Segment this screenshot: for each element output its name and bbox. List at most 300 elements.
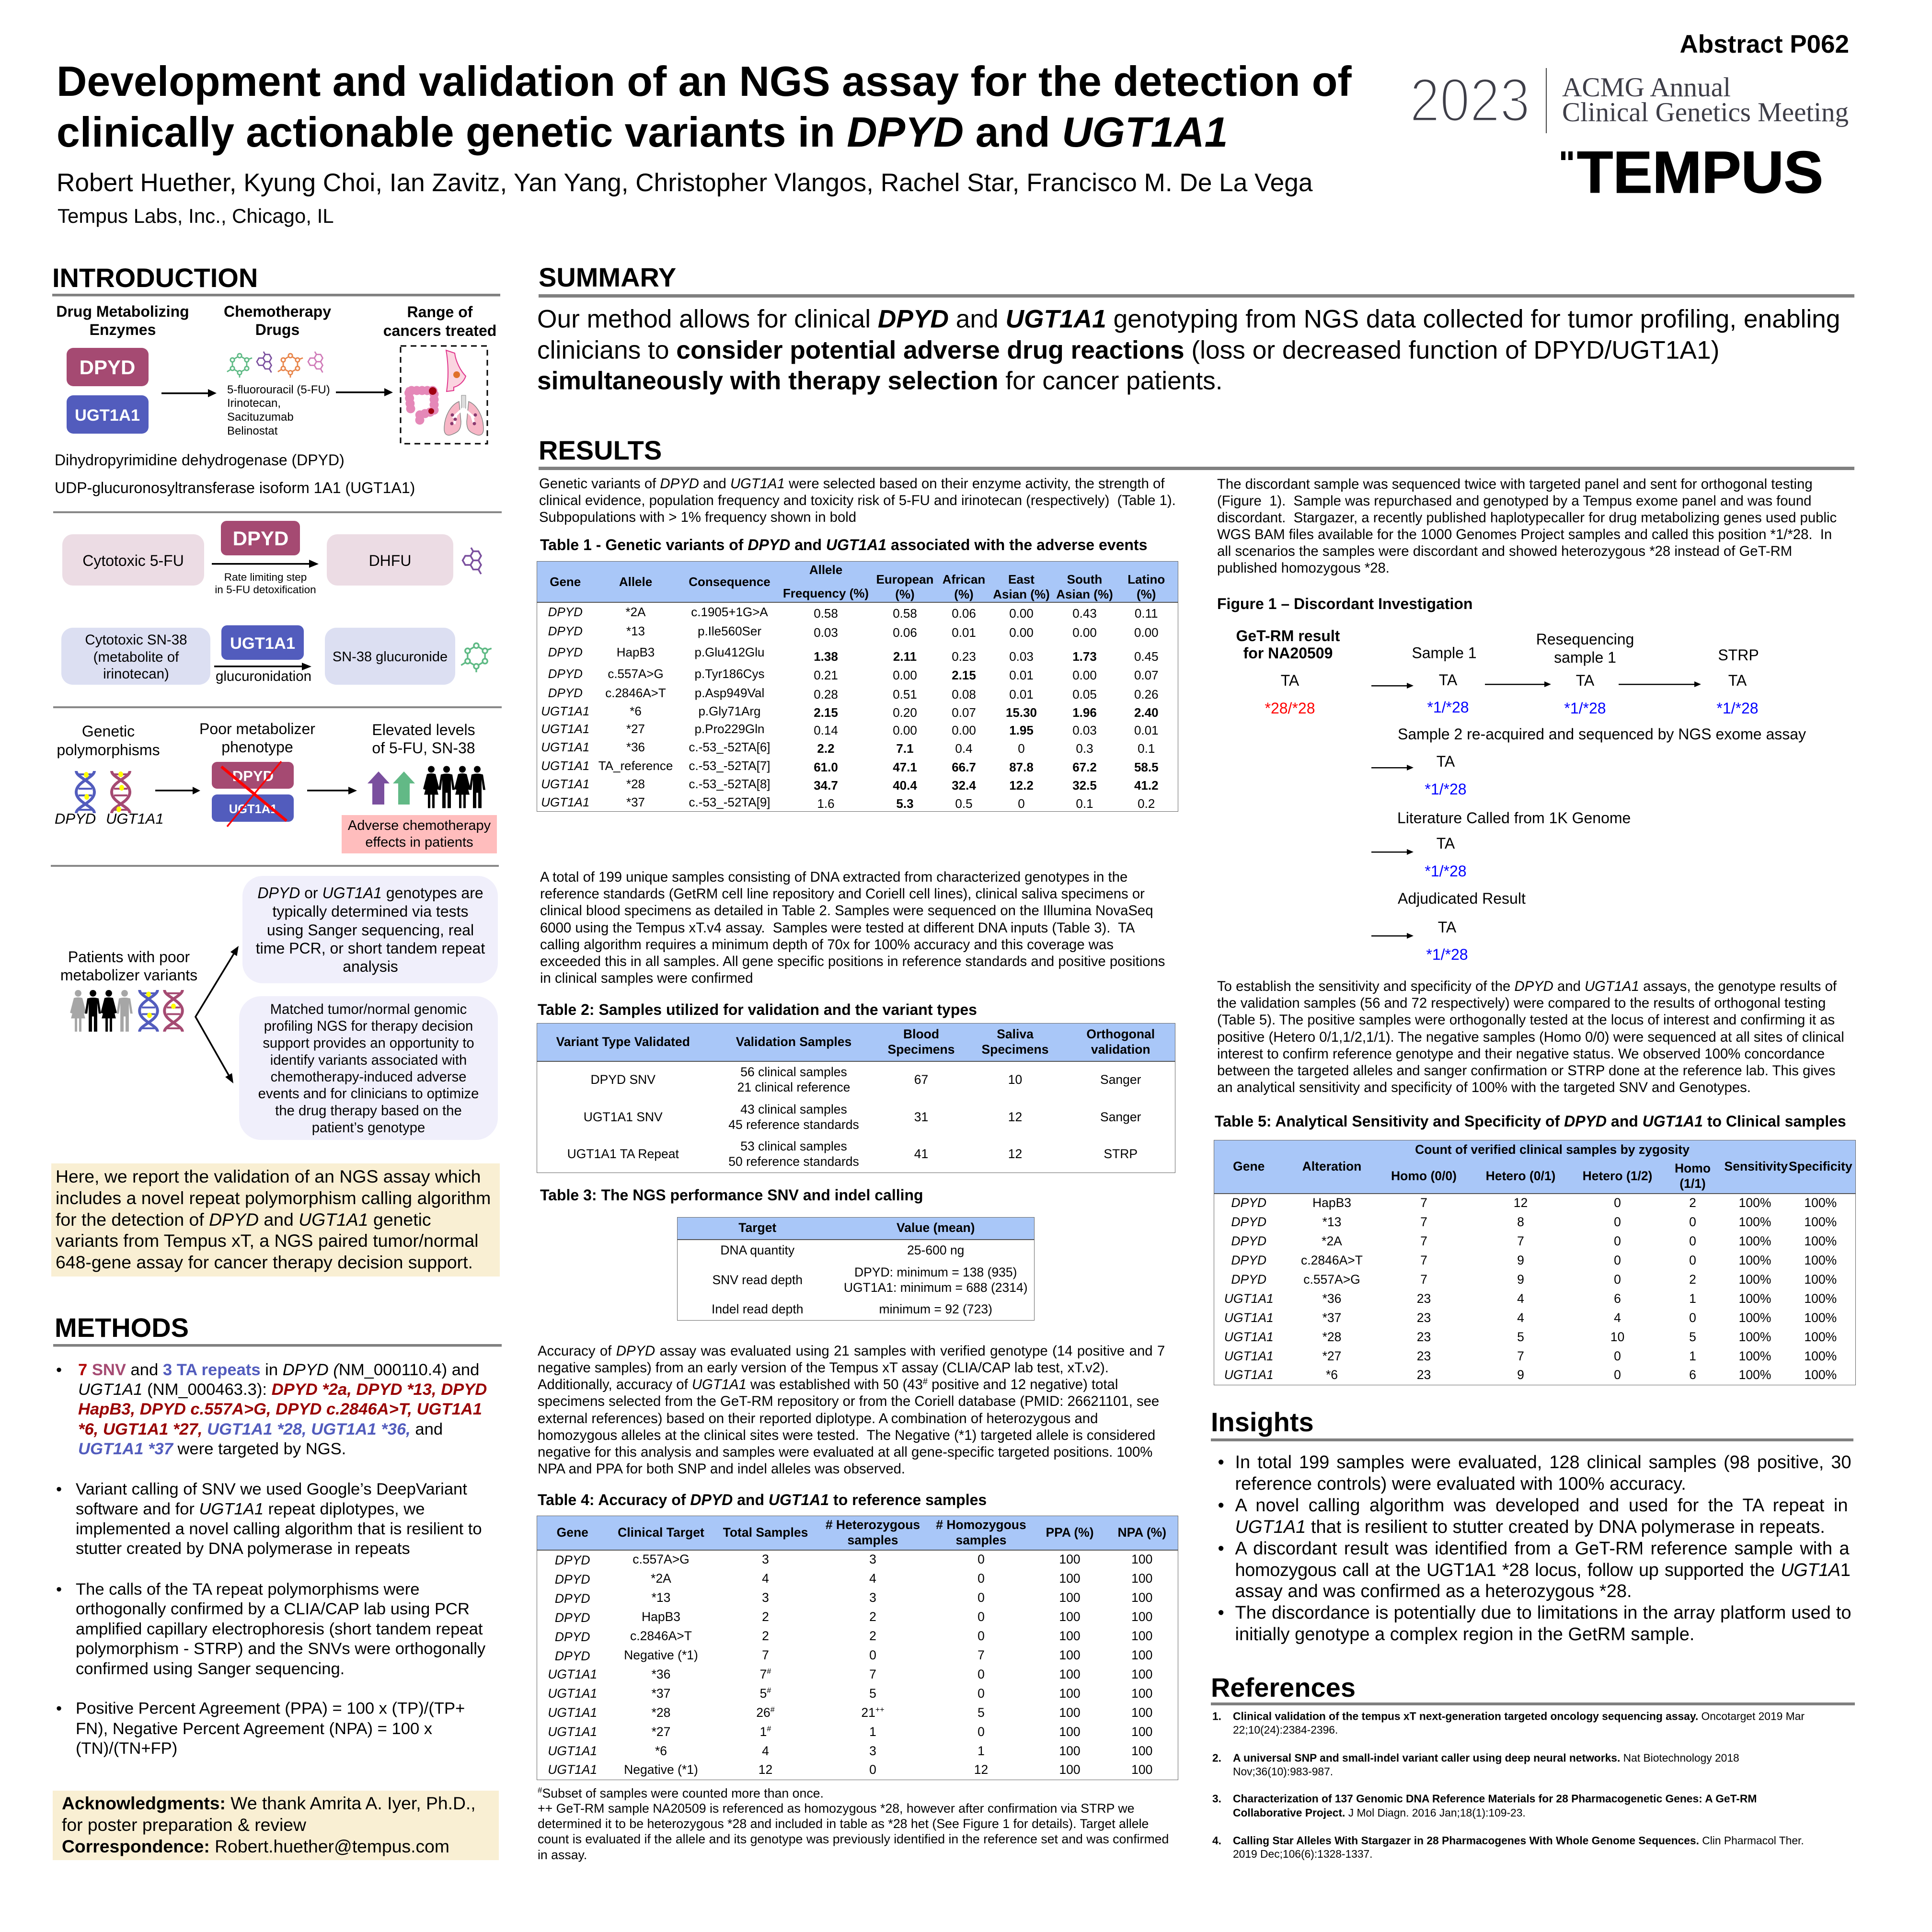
results paragraph: samples: reference standards (GetRM cell line repository and Coriell cell lines), clinical saliva specimens or xyxy=(540,886,1145,902)
table 1: genetic variants: 0.14 xyxy=(814,723,838,737)
insights bullets: UGT1A1 that is resilient to stutter created by DNA polymerase in repeats. xyxy=(1235,1517,1825,1537)
poor metabolizer phenotype xyxy=(199,720,315,827)
table 1: genetic variants: 12.2 xyxy=(1009,778,1034,793)
table 4: accuracy: 100 xyxy=(1131,1686,1152,1701)
heading: summary: SUMMARY xyxy=(539,262,676,292)
table 5: sensitivity and specificity: 0 xyxy=(1614,1368,1621,1382)
table 4: accuracy: 4 xyxy=(869,1571,876,1586)
table 1: genetic variants: Asian (%) xyxy=(993,587,1050,601)
callout: report statement: Here, we report the validation of an NGS assay which xyxy=(56,1166,481,1186)
table 1: genetic variants: 32.5 xyxy=(1072,778,1097,793)
table 5: sensitivity and specificity: 0 xyxy=(1614,1196,1621,1210)
genetic polymorphisms: DPYD xyxy=(55,810,96,827)
table 5: sensitivity and specificity: 100% xyxy=(1739,1291,1771,1306)
insights bullets: • xyxy=(1218,1539,1224,1559)
results paragraph: accuracy: external references) based on their reported diplotype. A combination of heterozygous and xyxy=(538,1411,1098,1426)
table 5: sensitivity and specificity: 4 xyxy=(1517,1311,1524,1325)
table 1: genetic variants: c.557A>G xyxy=(608,667,664,681)
table 1: genetic variants: c.1905+1G>A xyxy=(691,605,768,619)
table 2: validation samples: Variant Type Validated xyxy=(556,1035,690,1049)
results paragraph: samples: in clinical samples were confirmed xyxy=(540,970,753,986)
table 4 footnotes: determined it to be heterozygous *28 and included in table as *28 het (See Figure 1 for details). Target allele xyxy=(538,1817,1149,1831)
table 4: accuracy: 4 xyxy=(762,1571,769,1586)
table 5: sensitivity and specificity: 5 xyxy=(1517,1330,1524,1344)
bubble: matched tumor/normal: identify variants associated with xyxy=(270,1053,467,1068)
table 1: genetic variants: 0.00 xyxy=(1009,606,1034,621)
table 3: NGS performance xyxy=(677,1217,1035,1321)
table 4: accuracy: Negative (*1) xyxy=(624,1762,698,1777)
enzyme box: UGT1A1 xyxy=(67,395,149,434)
table 4: accuracy: *27 xyxy=(652,1725,670,1739)
results paragraph: discordant sample: all scenarios the samples were discordant and showed heterozygous *28 instead of GeT-RM xyxy=(1217,543,1792,559)
table 5: sensitivity and specificity: 100% xyxy=(1739,1272,1771,1287)
table 1: genetic variants: 0.3 xyxy=(1076,741,1093,756)
table 5: sensitivity and specificity: 100% xyxy=(1739,1234,1771,1248)
sample 1: TA xyxy=(1439,671,1458,689)
insights bullets: assay and was confirmed as a heterozygous *28. xyxy=(1235,1581,1632,1601)
column headers: cancers treated xyxy=(383,322,496,339)
results paragraph: samples: clinical blood specimens as detailed in Table 2. Samples were sequenced on the Illumina NovaSeq xyxy=(540,903,1153,919)
abstract number: Abstract P062 xyxy=(1679,30,1849,58)
results paragraph: sensitivity: (Table 5). The positive samples were orthogonally tested at the locus of interest and confirming it as xyxy=(1217,1012,1835,1028)
results paragraph: sensitivity: positive (Hetero 0/1,1/2,1/1). The negative samples (Homo 0/0) were sequenced at all sites of clinical xyxy=(1217,1029,1844,1045)
patients with poor metabolizer variants: Patients with poor xyxy=(68,948,190,966)
table 1: genetic variants: 0.03 xyxy=(1072,723,1097,737)
table 4: accuracy: 5# xyxy=(760,1686,771,1701)
table 5: sensitivity and specificity: Gene xyxy=(1233,1159,1265,1173)
icon: purple molecule xyxy=(463,548,481,574)
table 1: genetic variants: 0.00 xyxy=(1072,668,1097,682)
table 4: accuracy: *13 xyxy=(652,1590,670,1605)
bullet: targets: HapB3, DPYD c.557A>G, DPYD c.2846A>T, UGT1A1 xyxy=(78,1400,482,1418)
table 1: genetic variants: 0.26 xyxy=(1134,687,1159,702)
icon: drug molecules xyxy=(227,352,322,378)
table 4: accuracy: 2 xyxy=(869,1610,876,1624)
column headers: Drugs xyxy=(255,321,299,338)
table 5: sensitivity and specificity: 0 xyxy=(1614,1215,1621,1229)
bullet: orthogonal confirmation: amplified capillary electrophoresis (short tandem repeat xyxy=(76,1620,483,1638)
table 5: sensitivity and specificity: 7 xyxy=(1517,1234,1524,1248)
rate limiting caption: in 5-FU detoxification xyxy=(215,584,316,596)
table 5: sensitivity and specificity: 4 xyxy=(1517,1291,1524,1306)
table 4: accuracy: 100 xyxy=(1059,1725,1081,1739)
table 5: sensitivity and specificity xyxy=(1214,1140,1856,1385)
table 4: accuracy: UGT1A1 xyxy=(548,1686,597,1701)
table 1: genetic variants: 87.8 xyxy=(1009,760,1034,774)
table 2: validation samples: 45 reference standards xyxy=(728,1117,859,1132)
table 4: accuracy: 100 xyxy=(1059,1686,1081,1701)
heading: results xyxy=(539,435,1854,470)
table 5: sensitivity and specificity: DPYD xyxy=(1231,1234,1266,1248)
acknowledgments: Correspondence: Robert.huether@tempus.com xyxy=(62,1836,449,1856)
table 1: genetic variants: African xyxy=(943,572,985,586)
box: SN-38 glucuronide: SN-38 glucuronide xyxy=(333,649,448,665)
table 1: genetic variants: European xyxy=(876,572,933,586)
table 4: accuracy: 100 xyxy=(1059,1629,1081,1643)
results paragraph: samples: calling algorithm requires a minimum depth of 70x for 100% accuracy and this coverage was xyxy=(540,937,1114,953)
table 5: sensitivity and specificity: 0 xyxy=(1614,1234,1621,1248)
callout: report statement: for the detection of DPYD and UGT1A1 genetic xyxy=(56,1209,431,1230)
table 5: sensitivity and specificity: 7 xyxy=(1420,1234,1427,1248)
reference 2: Nov;36(10):983-987. xyxy=(1233,1765,1333,1778)
table 4: accuracy: 1 xyxy=(869,1725,876,1739)
table 5: sensitivity and specificity: Homo xyxy=(1675,1161,1711,1175)
results paragraph: accuracy: positive and 12 negative) total xyxy=(928,1377,1118,1392)
bubble: matched tumor/normal: patient’s genotype xyxy=(312,1120,425,1136)
bullet: orthogonal confirmation: The calls of the TA repeat polymorphisms were xyxy=(76,1580,420,1598)
table 5: sensitivity and specificity: Sensitivity xyxy=(1725,1159,1788,1173)
table 1: genetic variants: 41.2 xyxy=(1134,778,1159,793)
adjudicated row xyxy=(1371,890,1526,963)
table 1: genetic variants: 1.6 xyxy=(817,796,835,811)
column headers xyxy=(56,303,496,339)
table 1: genetic variants: 0.05 xyxy=(1072,687,1097,702)
bubble: current testing: using Sanger sequencing, real xyxy=(267,921,474,939)
table 1: genetic variants: 0 xyxy=(1018,796,1025,811)
table 1: genetic variants: 0.4 xyxy=(955,741,973,756)
bullet: targets: and 3 TA repeats in DPYD (NM_000110.4) and xyxy=(131,1361,479,1379)
table 5: sensitivity and specificity: 0 xyxy=(1614,1272,1621,1287)
table 5: sensitivity and specificity: 0 xyxy=(1689,1253,1696,1267)
bullet: targets: 7 SNV xyxy=(78,1361,126,1379)
table 2: validation samples: 41 xyxy=(914,1147,928,1161)
table 4: accuracy: 21++ xyxy=(861,1705,885,1720)
table 5: sensitivity and specificity: UGT1A1 xyxy=(1224,1291,1274,1306)
results paragraph: discordant sample: (Figure 1). Sample was repurchased and genotyped by a Tempus exome panel and was found xyxy=(1217,493,1811,509)
acknowledgments: for poster preparation & review xyxy=(62,1815,307,1835)
table 1: genetic variants: UGT1A1 xyxy=(541,777,589,791)
logo: Tempus: TEMPUS xyxy=(1577,140,1823,206)
table 1: genetic variants: 1.95 xyxy=(1009,723,1034,737)
insights bullets: initially genotype a complex region in the GetRM sample. xyxy=(1235,1624,1694,1644)
adjudicated row: Adjudicated Result xyxy=(1398,890,1526,907)
table 1: genetic variants: 0.28 xyxy=(814,687,838,702)
table 5: sensitivity and specificity: 100% xyxy=(1804,1272,1837,1287)
box: cytotoxic SN-38: Cytotoxic SN-38 xyxy=(85,632,187,648)
table 4: accuracy: 7 xyxy=(762,1648,769,1662)
table 4: accuracy: c.557A>G xyxy=(632,1552,690,1566)
methods bullets xyxy=(56,1361,487,1758)
table 5: sensitivity and specificity: 100% xyxy=(1804,1234,1837,1248)
table 3 title: Table 3: The NGS performance SNV and indel calling xyxy=(540,1186,923,1204)
bullet: targets: • xyxy=(56,1361,62,1379)
drug list: Irinotecan, xyxy=(227,397,281,410)
table 5: sensitivity and specificity: 0 xyxy=(1614,1253,1621,1267)
table 2: validation samples: Saliva xyxy=(997,1027,1034,1041)
table 4 footnotes: ++ GeT-RM sample NA20509 is referenced as homozygous *28, however after confirmation via STRP we xyxy=(538,1801,1135,1816)
table 4: accuracy: DPYD xyxy=(555,1591,590,1606)
icon: green molecule xyxy=(461,643,492,672)
table 4 footnotes: # xyxy=(538,1785,542,1795)
callout: adverse effects: effects in patients xyxy=(365,835,473,850)
STRP: *1/*28 xyxy=(1716,700,1759,717)
table 1: genetic variants: 66.7 xyxy=(952,760,976,774)
results paragraph: samples: A total of 199 unique samples consisting of DNA extracted from characterized genotypes in the xyxy=(540,869,1127,885)
table 1: genetic variants: *36 xyxy=(626,740,645,754)
table 4: accuracy: 0 xyxy=(978,1610,985,1624)
table 1: genetic variants: UGT1A1 xyxy=(541,795,589,809)
insights bullets: • xyxy=(1218,1452,1224,1472)
arrow xyxy=(155,787,200,794)
bubble: current testing: time PCR, or short tandem repeat xyxy=(256,940,485,957)
table 5: sensitivity and specificity: 2 xyxy=(1689,1272,1696,1287)
sample 2 row: TA xyxy=(1437,753,1455,770)
table 4: accuracy: 100 xyxy=(1059,1744,1081,1758)
table 5: sensitivity and specificity: 1 xyxy=(1689,1291,1696,1306)
table 1: genetic variants: (%) xyxy=(1137,587,1156,601)
table 5: sensitivity and specificity: (1/1) xyxy=(1679,1176,1706,1190)
table 5: sensitivity and specificity: Specificity xyxy=(1789,1159,1852,1173)
table 4: accuracy: 3 xyxy=(869,1744,876,1758)
table 5: sensitivity and specificity: c.2846A>T xyxy=(1301,1253,1363,1267)
table 4: accuracy: 2 xyxy=(869,1629,876,1643)
arrow xyxy=(1619,681,1701,687)
arrow: drugs to cancers xyxy=(336,388,393,396)
panel: enzymes, drugs and cancers xyxy=(55,303,496,496)
summary text: simultaneously with therapy selection for cancer patients. xyxy=(537,367,1223,395)
table 1: genetic variants: 1.96 xyxy=(1072,705,1097,720)
table 1: genetic variants: 5.3 xyxy=(896,796,914,811)
table 5: sensitivity and specificity: 9 xyxy=(1517,1272,1524,1287)
table 1: genetic variants: DPYD xyxy=(548,645,583,659)
genetic polymorphisms: polymorphisms xyxy=(57,741,160,759)
table 4: accuracy: DPYD xyxy=(555,1572,590,1587)
table 1: genetic variants: *27 xyxy=(626,722,645,736)
poor metabolizer phenotype: UGT1A1 xyxy=(229,803,277,816)
table 4: accuracy: 1 xyxy=(978,1744,985,1758)
reference 2: 2. xyxy=(1212,1752,1221,1764)
panel: poor metabolizer flow xyxy=(55,720,497,853)
table 5: sensitivity and specificity: *37 xyxy=(1322,1311,1341,1325)
table 1: genetic variants: 0 xyxy=(1018,741,1025,756)
bullet: orthogonal confirmation: confirmed using Sanger sequencing. xyxy=(76,1660,345,1678)
column headers: Chemotherapy xyxy=(224,303,331,320)
table 4: accuracy: 0 xyxy=(978,1686,985,1701)
table 5: sensitivity and specificity: 5 xyxy=(1689,1330,1696,1344)
table 5: sensitivity and specificity: HapB3 xyxy=(1312,1196,1351,1210)
table 1: genetic variants: 58.5 xyxy=(1134,760,1159,774)
table 5: sensitivity and specificity: 2 xyxy=(1689,1196,1696,1210)
table 5: sensitivity and specificity: 4 xyxy=(1614,1311,1621,1325)
reference 4: Clin Pharmacol Ther. xyxy=(1702,1834,1804,1847)
drug list: Sacituzumab xyxy=(227,411,294,424)
column headers: Drug Metabolizing xyxy=(56,303,189,320)
table 1: genetic variants: 2.11 xyxy=(893,649,917,664)
reference 1: Clinical validation of the tempus xT next-generation targeted oncology sequencing assay. xyxy=(1233,1710,1698,1722)
sample 1: Sample 1 xyxy=(1412,644,1477,661)
table 4: accuracy: *37 xyxy=(652,1686,670,1701)
results paragraph: sensitivity: an analytical sensitivity and specificity of 100% with the targeted SNV and Genotypes. xyxy=(1217,1080,1751,1095)
table 3: NGS performance: Indel read depth xyxy=(712,1302,804,1316)
sample 1 xyxy=(1412,644,1477,716)
table 4: accuracy: 100 xyxy=(1059,1648,1081,1662)
table 4: accuracy: Gene xyxy=(557,1525,588,1540)
table 5: sensitivity and specificity: 0 xyxy=(1614,1349,1621,1363)
table 4: accuracy: 0 xyxy=(869,1762,876,1777)
table 2: validation samples: Sanger xyxy=(1100,1072,1141,1087)
table 1: genetic variants: 0.00 xyxy=(893,723,917,737)
table 4: accuracy: 0 xyxy=(869,1648,876,1662)
table 1: genetic variants: Frequency (%) xyxy=(783,586,869,600)
reference 1: 22;10(24):2384-2396. xyxy=(1233,1724,1338,1736)
table 4: accuracy: 5 xyxy=(978,1705,985,1720)
table 1: genetic variants: 0.00 xyxy=(1134,625,1159,640)
STRP xyxy=(1716,646,1759,717)
table 4 title: Table 4: Accuracy of DPYD and UGT1A1 to reference samples xyxy=(538,1491,987,1508)
bullet: orthogonal confirmation: • xyxy=(56,1580,62,1598)
table 1: genetic variants: 0.23 xyxy=(952,649,976,664)
table 1: genetic variants: (%) xyxy=(895,587,915,601)
table 2: validation samples: DPYD SNV xyxy=(590,1072,656,1087)
enzyme definitions: UDP-glucuronosyltransferase isoform 1A1 (UGT1A1) xyxy=(55,479,415,496)
table 1: genetic variants: 40.4 xyxy=(893,778,917,793)
bubble: current testing: DPYD or UGT1A1 genotypes are xyxy=(257,885,483,902)
table 4: accuracy: DPYD xyxy=(555,1553,590,1567)
table 4: accuracy: 100 xyxy=(1131,1571,1152,1586)
table 5: sensitivity and specificity: 100% xyxy=(1739,1215,1771,1229)
table 4: accuracy: 0 xyxy=(978,1552,985,1566)
reference 3: Characterization of 137 Genomic DNA Reference Materials for 28 Pharmacogenetic Genes: A GeT-RM xyxy=(1233,1792,1757,1805)
callout: report statement xyxy=(51,1163,500,1276)
table 2: validation samples: Specimens xyxy=(888,1042,954,1057)
table 2: validation samples: Validation Samples xyxy=(736,1035,851,1049)
table 1: genetic variants: 0.01 xyxy=(1134,723,1159,737)
box: cytotoxic SN-38: (metabolite of xyxy=(93,649,179,665)
table 1: genetic variants: p.Pro229Gln xyxy=(695,722,764,736)
table 4: accuracy: 7 xyxy=(869,1667,876,1681)
heading: insights: Insights xyxy=(1211,1407,1314,1437)
table 5: sensitivity and specificity: Homo (0/0) xyxy=(1391,1169,1457,1183)
table 5: sensitivity and specificity: 100% xyxy=(1739,1368,1771,1382)
table 2: validation samples: Sanger xyxy=(1100,1110,1141,1124)
table 1: genetic variants: 34.7 xyxy=(814,778,838,793)
table 1: genetic variants: 0.06 xyxy=(893,625,917,640)
table 5: sensitivity and specificity: Alteration xyxy=(1302,1159,1361,1173)
insights bullets: A discordant result was identified from a GeT-RM reference sample with a xyxy=(1235,1539,1850,1559)
arrow: enzymes to drugs xyxy=(161,389,217,397)
arrow: split xyxy=(196,946,239,1083)
table 1: genetic variants: 0.5 xyxy=(955,796,973,811)
logo: ACMG 2023 meeting: Clinical Genetics Meeting xyxy=(1562,97,1849,127)
table 5: sensitivity and specificity: 7 xyxy=(1420,1196,1427,1210)
table 1: genetic variants: 0.51 xyxy=(893,687,917,702)
bullet: variant calling: implemented a novel calling algorithm that is resilient to xyxy=(76,1520,482,1538)
reference 1: Oncotarget 2019 Mar xyxy=(1701,1710,1805,1722)
table 1: genetic variants: 0.58 xyxy=(893,606,917,621)
results paragraph: accuracy: negative for this analysis and samples were evaluated at all gene-specific targeted positions. 100% xyxy=(538,1444,1152,1460)
results paragraph: accuracy: Accuracy of DPYD assay was evaluated using 21 samples with verified genotype (14 positive and 7 xyxy=(538,1343,1165,1359)
callout: report statement: variants from Tempus xT, a NGS paired tumor/normal xyxy=(56,1230,478,1251)
results paragraph: samples: exceeded this in all samples. All gene specific positions in reference standards and positive positions xyxy=(540,954,1165,969)
table 4: accuracy: 3 xyxy=(762,1552,769,1566)
table 1: genetic variants: Asian (%) xyxy=(1056,587,1113,601)
genetic polymorphisms: Genetic xyxy=(82,723,135,740)
table 2: validation samples: 31 xyxy=(914,1110,928,1124)
table 5: sensitivity and specificity: 6 xyxy=(1614,1291,1621,1306)
table 1: genetic variants: UGT1A1 xyxy=(541,722,589,736)
heading: insights xyxy=(1211,1407,1853,1441)
table 4: accuracy: *28 xyxy=(652,1705,670,1720)
table 1: genetic variants: 0.1 xyxy=(1138,741,1155,756)
bubble: matched tumor/normal: support provides an opportunity to xyxy=(263,1036,474,1051)
results paragraph: accuracy: # xyxy=(923,1377,928,1386)
table 4: accuracy: 100 xyxy=(1059,1762,1081,1777)
table 2: validation samples: 21 clinical reference xyxy=(737,1080,850,1094)
table 4: accuracy: DPYD xyxy=(555,1630,590,1644)
table 1: genetic variants: 0.00 xyxy=(893,668,917,682)
table 5: sensitivity and specificity: 9 xyxy=(1517,1253,1524,1267)
GeT-RM result xyxy=(1236,627,1340,717)
table 1: genetic variants: 32.4 xyxy=(952,778,976,793)
table 4: accuracy: UGT1A1 xyxy=(548,1667,597,1681)
table 2: validation samples: 67 xyxy=(914,1072,928,1087)
heading: results: RESULTS xyxy=(539,435,662,465)
results paragraph: sensitivity: the validation samples (56 and 72 respectively) were compared to the results of orthogonal testing xyxy=(1217,995,1826,1011)
table 5: sensitivity and specificity: UGT1A1 xyxy=(1224,1311,1274,1325)
table 1: genetic variants: UGT1A1 xyxy=(541,740,589,754)
table 4: accuracy: 100 xyxy=(1131,1762,1152,1777)
table 5: sensitivity and specificity: 0 xyxy=(1689,1311,1696,1325)
table 4 footnotes: count is evaluated if the allele and its genotype was previously identified in the reference set and was confirmed xyxy=(538,1832,1169,1846)
logo: ACMG 2023 meeting: ACMG Annual xyxy=(1562,72,1731,103)
GeT-RM result: GeT-RM result xyxy=(1236,627,1340,644)
table 1: genetic variants: 0.03 xyxy=(1009,649,1034,664)
poor metabolizer phenotype: Poor metabolizer xyxy=(199,720,315,737)
table 3: NGS performance: minimum = 92 (723) xyxy=(879,1302,992,1316)
table 4: accuracy: 5 xyxy=(869,1686,876,1701)
table 5: sensitivity and specificity: 100% xyxy=(1804,1368,1837,1382)
table 2: validation samples: 12 xyxy=(1008,1110,1022,1124)
glucuronidation label: glucuronidation xyxy=(216,668,311,684)
table 4: accuracy: 100 xyxy=(1059,1667,1081,1681)
table 5: sensitivity and specificity: 23 xyxy=(1417,1368,1431,1382)
table 5: sensitivity and specificity: 23 xyxy=(1417,1330,1431,1344)
table 4: accuracy: 26# xyxy=(756,1705,775,1720)
table 4: accuracy: 2 xyxy=(762,1629,769,1643)
table 5: sensitivity and specificity: 100% xyxy=(1739,1311,1771,1325)
table 1: genetic variants: 0.07 xyxy=(1134,668,1159,682)
table 3: NGS performance: Value (mean) xyxy=(897,1220,975,1235)
enzyme box: DPYD xyxy=(67,348,149,386)
table 1: genetic variants: 0.03 xyxy=(814,625,838,640)
table 4: accuracy: 2 xyxy=(762,1610,769,1624)
column headers: Range of xyxy=(407,303,473,321)
bullet: PPA and NPA: • xyxy=(56,1699,62,1717)
results paragraph: discordant sample: The discordant sample was sequenced twice with targeted panel and sent for orthogonal testing xyxy=(1217,476,1813,492)
table 4: accuracy: 100 xyxy=(1131,1705,1152,1720)
sample 2 row xyxy=(1371,725,1806,798)
table 4: accuracy: 100 xyxy=(1131,1610,1152,1624)
table 1: genetic variants: Consequence xyxy=(689,575,770,589)
table 5: sensitivity and specificity: 23 xyxy=(1417,1311,1431,1325)
elevated levels: Elevated levels xyxy=(372,721,475,738)
table 4: accuracy: # Heterozygous xyxy=(826,1518,920,1532)
table 5: sensitivity and specificity: 100% xyxy=(1804,1349,1837,1363)
table 2: validation samples: Blood xyxy=(903,1027,939,1041)
table 1: genetic variants: *28 xyxy=(626,777,645,791)
authors: Robert Huether, Kyung Choi, Ian Zavitz, Yan Yang, Christopher Vlangos, Rachel Star, Francisco M. De La Vega xyxy=(57,169,1313,197)
table 1: genetic variants: 0.21 xyxy=(814,668,838,682)
table 5: sensitivity and specificity: 100% xyxy=(1739,1196,1771,1210)
table 1: genetic variants: Allele xyxy=(809,563,842,577)
table 5: sensitivity and specificity: 100% xyxy=(1804,1291,1837,1306)
table 1: genetic variants: 0.11 xyxy=(1135,606,1158,621)
table 1: genetic variants: *2A xyxy=(626,605,645,619)
heading: summary xyxy=(539,262,1854,298)
table 4: accuracy: samples xyxy=(847,1533,898,1547)
table 1: genetic variants: 7.1 xyxy=(896,741,914,756)
table 5: sensitivity and specificity: 23 xyxy=(1417,1349,1431,1363)
